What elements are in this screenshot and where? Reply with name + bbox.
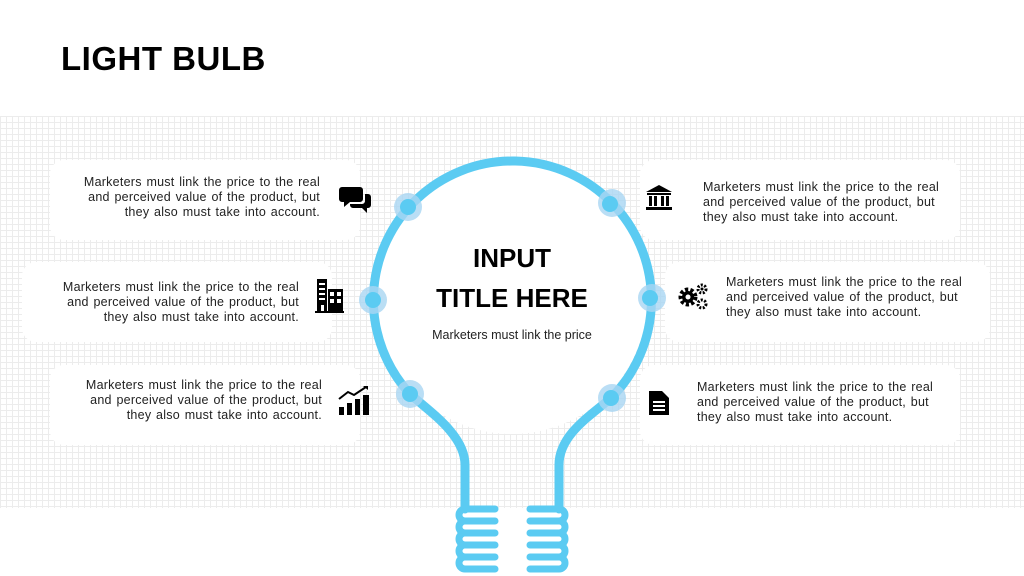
- text: left 1: Marketers must link the price to the real: [84, 175, 320, 189]
- text: right 1: and perceived value of the product, but: [703, 195, 935, 209]
- text: left 3: [86, 378, 322, 422]
- text: left 3: and perceived value of the product, but: [90, 393, 322, 407]
- text: right 3: and perceived value of the product, but: [697, 395, 929, 409]
- text: right 1: [703, 180, 939, 224]
- icon: chat: [339, 187, 371, 213]
- text: left 2: [63, 280, 299, 324]
- panel: left 1: [50, 160, 360, 240]
- icon: gears: [678, 284, 708, 310]
- icon: bank: [646, 185, 672, 210]
- center subtitle: Marketers must link the price: [432, 328, 592, 342]
- text: right 3: [697, 380, 933, 424]
- text: right 1: Marketers must link the price to the real: [703, 180, 939, 194]
- center title: INPUT: [473, 243, 551, 273]
- panel: right 2: [665, 262, 990, 342]
- panel: left 3: [50, 365, 360, 445]
- text: right 3: they also must take into account.: [697, 410, 892, 424]
- text: right 2: and perceived value of the product, but: [726, 290, 958, 304]
- text: right 2: they also must take into account.: [726, 305, 921, 319]
- icon: building: [315, 279, 344, 313]
- text: left 2: Marketers must link the price to the real: [63, 280, 299, 294]
- text: left 3: Marketers must link the price to the real: [86, 378, 322, 392]
- text: right 3: Marketers must link the price to the real: [697, 380, 933, 394]
- panel: right 3: [640, 365, 960, 445]
- text: left 1: they also must take into account.: [125, 205, 320, 219]
- text: left 1: and perceived value of the product, but: [88, 190, 320, 204]
- panel: right 1: [640, 160, 960, 240]
- text: right 2: [726, 275, 962, 319]
- center title: TITLE HERE: [436, 283, 588, 313]
- icon: document: [649, 391, 669, 415]
- text: left 3: they also must take into account.: [127, 408, 322, 422]
- icon: chart: [338, 386, 369, 415]
- title: LIGHT BULB: [61, 40, 266, 77]
- text: right 1: they also must take into account.: [703, 210, 898, 224]
- text: left 2: and perceived value of the product, but: [67, 295, 299, 309]
- center title: [436, 243, 588, 313]
- panel: left 2: [22, 262, 332, 342]
- text: left 2: they also must take into account.: [104, 310, 299, 324]
- text: right 2: Marketers must link the price to the real: [726, 275, 962, 289]
- text: left 1: [84, 175, 320, 219]
